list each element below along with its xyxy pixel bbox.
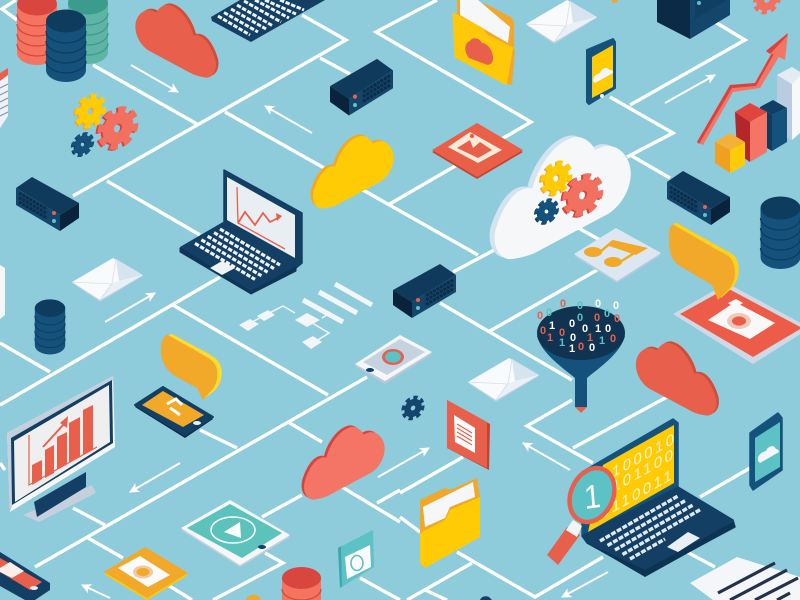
binary digits: 0 [595, 298, 601, 310]
icon: monitor with bar chart [7, 376, 115, 522]
icon: keyboard top [211, 0, 325, 42]
icon: partial navy shape bottom [480, 596, 492, 600]
icon: red document tile [447, 400, 490, 470]
icon: video tablet [181, 500, 290, 567]
binary digits: 0 [578, 341, 584, 353]
icon: partial yellow gear bottom [246, 595, 260, 600]
icon: phone bottom left [0, 552, 50, 600]
icon: partial yellow gear at top [611, 0, 618, 3]
icon: music tile [574, 228, 661, 283]
icon: data funnel [537, 298, 625, 413]
icon: small database left [35, 299, 65, 354]
binary digits: 1 [599, 335, 605, 347]
binary digits: 0 [540, 325, 546, 337]
icon: gears left [72, 93, 135, 157]
icon: white cloud with gears [490, 135, 631, 259]
icon: red cloud top [135, 3, 218, 78]
icon: envelope centre [468, 358, 539, 402]
icon: growth chart with arrow [697, 33, 800, 173]
binary digits: 0 [605, 323, 611, 335]
icon: red gear at top right [755, 0, 779, 14]
gears in cloud [536, 160, 600, 225]
icon: phone horizontal with dial [355, 335, 432, 384]
icon: gear centre [403, 395, 423, 421]
icon: teal camera tile [338, 530, 374, 588]
binary digits: 0 [570, 332, 576, 344]
icon: laptop with line chart [180, 170, 302, 294]
binary digits: 0 [613, 300, 619, 312]
binary digits: 1 [559, 337, 565, 349]
icon: phone with music note [135, 387, 213, 438]
binary digits: 0 [582, 323, 588, 335]
icon: server upper centre [330, 59, 393, 116]
icon: document bottom right [690, 557, 800, 600]
direction arrows [82, 65, 715, 598]
binary digits: 0 [537, 310, 543, 322]
binary digits: 0 [594, 312, 600, 324]
icon: laptop with binary screen and magnifier: 100010 [612, 429, 676, 482]
binary digits: 1 [569, 343, 575, 355]
icon: camera tile [104, 547, 188, 600]
binary digits: 0 [604, 308, 610, 320]
icon: laptop with binary screen and magnifier [547, 419, 735, 577]
icon: table at left edge [0, 68, 8, 128]
binary digits: 1 [549, 320, 555, 332]
binary digits: 0 [569, 318, 575, 330]
binary digits: 1 [587, 332, 593, 344]
icon: laptop with binary screen and magnifier: 101100 [612, 445, 675, 497]
database stacks top left [17, 0, 108, 82]
binary digits: 0 [577, 300, 583, 312]
icon: server centre [393, 264, 456, 318]
icon: server left [16, 177, 79, 231]
binary digits [537, 298, 620, 355]
icon: speech bubble left [161, 334, 222, 400]
magnifier: 1 [583, 476, 602, 516]
icon: white strip at left edge [0, 265, 5, 319]
icon: folder bottom [420, 478, 480, 568]
icon: envelope left [72, 258, 143, 302]
icon: folder top [453, 0, 515, 85]
icon: yellow cloud [311, 134, 394, 209]
icon: server right [667, 171, 730, 225]
icon: envelope top [526, 0, 597, 44]
icon: camera tablet [673, 283, 800, 364]
binary digits: 1 [595, 323, 601, 335]
binary digits: 0 [577, 312, 583, 324]
icon: phone right [750, 413, 782, 490]
icon: red database bottom [282, 567, 321, 600]
icon: speech bubble right [669, 223, 739, 300]
icon: laptop with binary screen and magnifier: 0110011 [601, 465, 674, 523]
binary digits: 0 [610, 333, 616, 345]
magnifier [547, 461, 623, 565]
binary digits: 0 [546, 307, 552, 319]
binary digits: 1 [547, 332, 553, 344]
binary digits: 0 [560, 298, 566, 310]
icon: database right [760, 196, 800, 269]
icon: server top right [657, 0, 730, 39]
binary digits: 0 [614, 313, 620, 325]
icon: phone with cloud [587, 39, 615, 104]
icon: flowchart [239, 284, 372, 349]
icon: red cloud right [636, 341, 719, 416]
icon: photo tile [432, 123, 523, 179]
icon: coral cloud [302, 425, 385, 500]
binary digits: 0 [589, 342, 595, 354]
binary digits: 0 [559, 327, 565, 339]
